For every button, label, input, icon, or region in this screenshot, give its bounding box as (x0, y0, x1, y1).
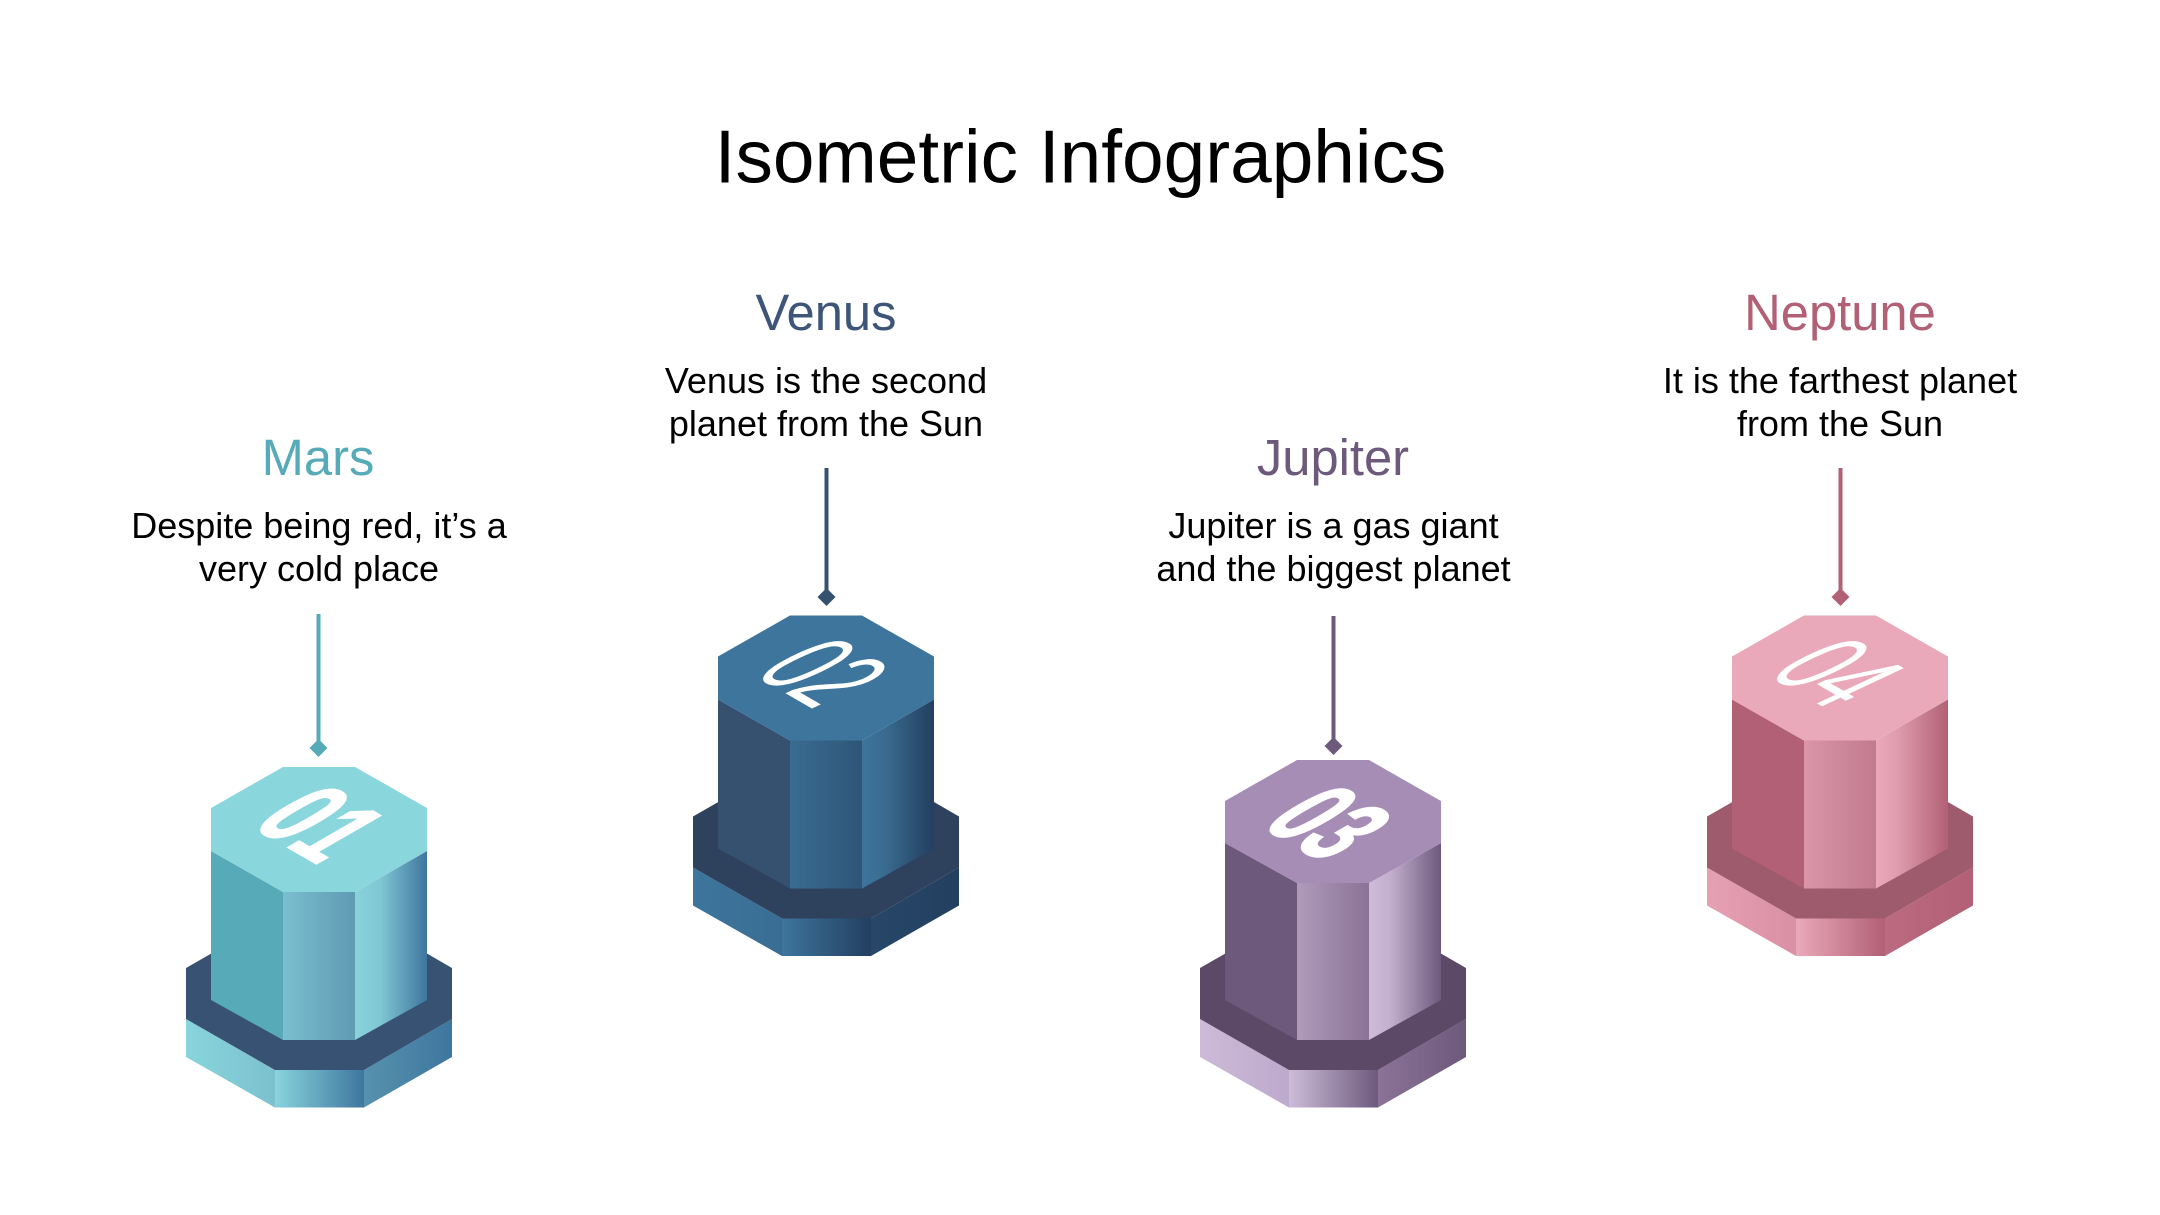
panel: Venus column (665, 284, 987, 956)
number 02: 02 (730, 620, 914, 726)
arrow: Neptune pointer (1832, 468, 1850, 606)
arrow: Venus pointer (818, 468, 836, 606)
number 03: 03 (1235, 769, 1421, 877)
text block: Mars description: Despite being red, it’s a (131, 505, 508, 546)
text block: Mars description: very cold place (199, 548, 439, 589)
panel: Neptune column (1663, 284, 2017, 956)
icon: isometric tower 01 (186, 767, 452, 1108)
text block: Jupiter description: Jupiter is a gas giant (1168, 505, 1499, 546)
icon: isometric tower 02 (693, 616, 959, 956)
title: Isometric Infographics (715, 114, 1446, 198)
icon: isometric tower 04 (1707, 616, 1973, 956)
heading: Mars: Mars (262, 429, 374, 486)
heading: Venus: Venus (756, 284, 896, 341)
panel: Jupiter column (1156, 429, 1511, 1108)
number 01: 01 (226, 769, 415, 878)
text block: Jupiter description: and the biggest planet (1156, 548, 1511, 589)
heading: Jupiter: Jupiter (1257, 429, 1409, 486)
text block: Venus description: Venus is the second (665, 360, 987, 401)
heading: Neptune: Neptune (1744, 284, 1936, 341)
panel: Mars column (131, 429, 508, 1108)
text block: Neptune description: It is the farthest planet (1663, 360, 2017, 401)
arrow: Jupiter pointer (1324, 616, 1342, 755)
arrow: Mars pointer (310, 614, 328, 757)
number 04: 04 (1744, 620, 1928, 726)
icon: isometric tower 03 (1200, 760, 1466, 1108)
text block: Neptune description: from the Sun (1737, 403, 1943, 444)
text block: Venus description: planet from the Sun (669, 403, 983, 444)
